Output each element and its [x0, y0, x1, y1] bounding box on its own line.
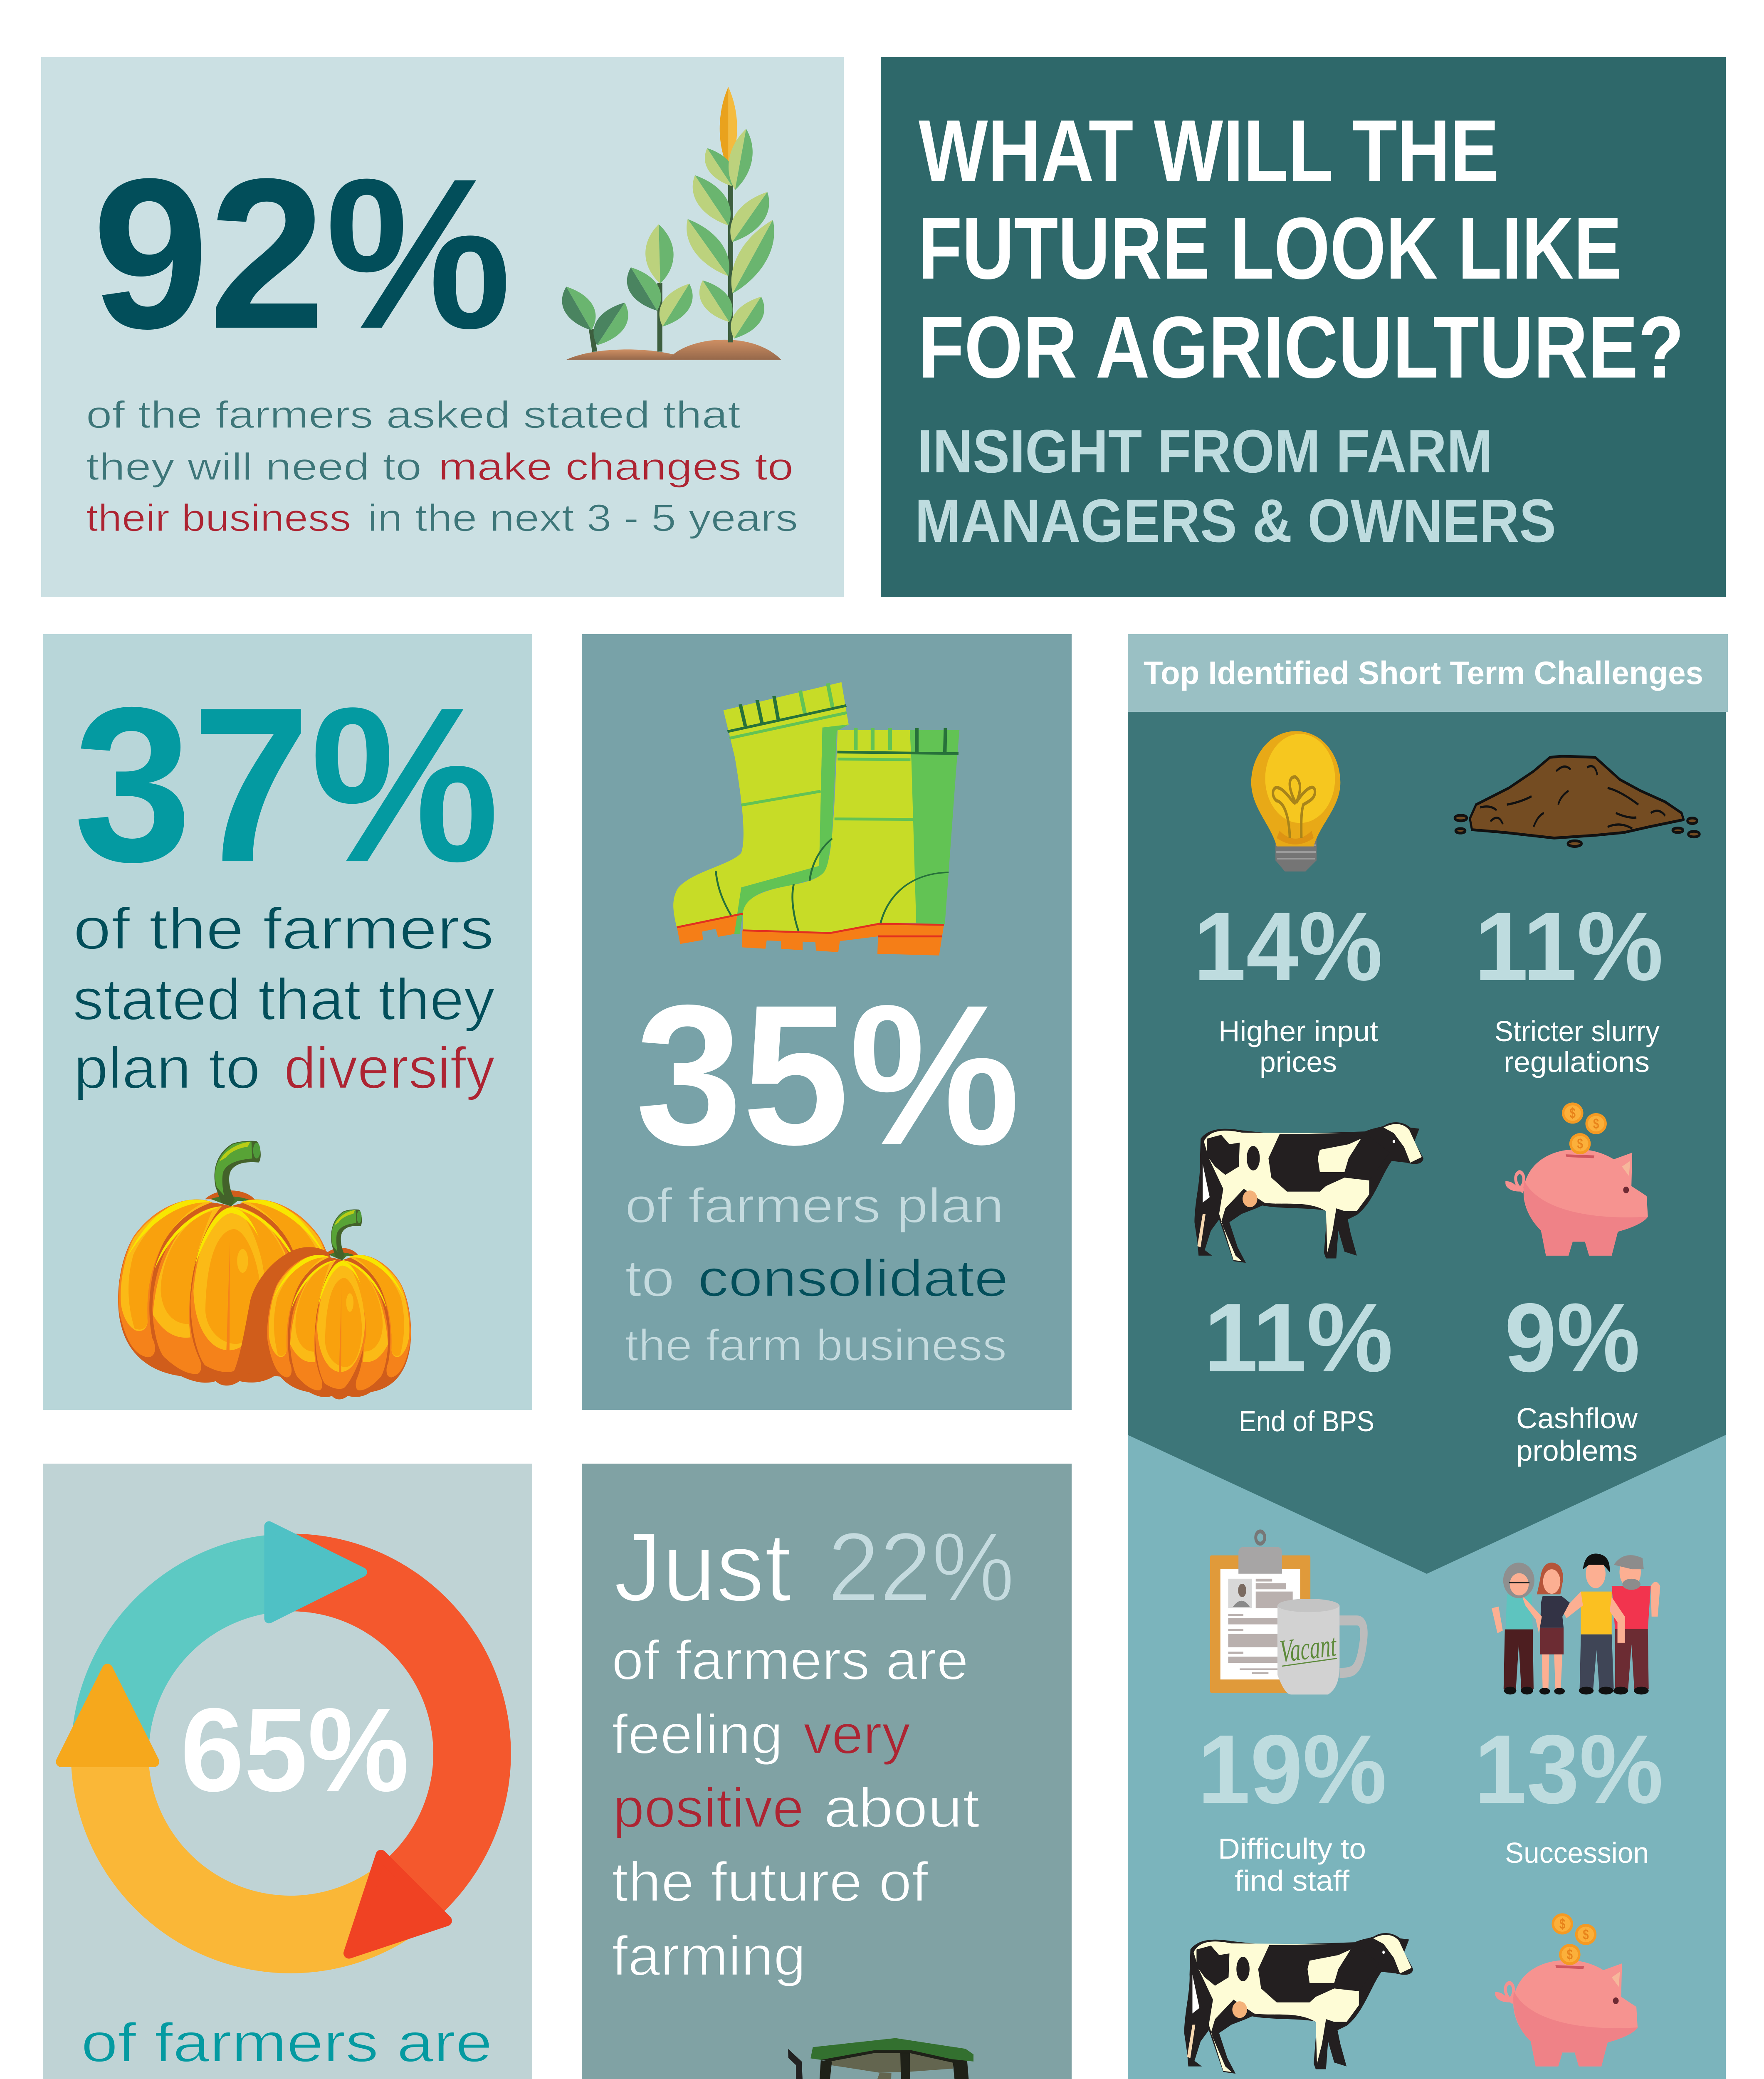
icon: family group [1492, 1553, 1660, 1694]
donut cycle chart [61, 1526, 472, 1953]
icon: green tractor [632, 2038, 1043, 2079]
stat: 11% slurry: regulations [1504, 1046, 1650, 1078]
text: 92% description: of the farmers asked stated that [86, 394, 741, 436]
text: 37% description: plan to [74, 1035, 260, 1101]
stat: 11% slurry: Stricter slurry [1495, 1015, 1660, 1047]
icon: slurry heap [1455, 756, 1700, 847]
icon: cow [1194, 1122, 1423, 1263]
stat: 11% BPS: 11% [1204, 1283, 1393, 1392]
text: 92% description: in the next 3 - 5 years [368, 497, 798, 539]
text: positive description: the future of [612, 1851, 929, 1913]
text: 35% description: of farmers plan [625, 1178, 1004, 1233]
text: just 22%: Just [614, 1512, 791, 1622]
big number 35%: 35% [635, 963, 1020, 1186]
text: 92% description: they will need to [86, 446, 422, 488]
subheading [915, 417, 1556, 555]
big number 37%: 37% [74, 662, 499, 908]
text: 35% description [625, 1178, 1008, 1370]
text: 92% description [86, 394, 798, 539]
panel: title [881, 57, 1726, 597]
panel: 37% diversify [43, 634, 532, 1410]
stat: 19% staff [1198, 1714, 1387, 1897]
stat: 13% succession: 13% [1474, 1714, 1663, 1824]
stat: 9% cashflow: Cashflow [1516, 1402, 1638, 1435]
text: positive description: of farmers are [612, 1630, 968, 1691]
panel: 35% consolidate [582, 634, 1072, 1410]
stat: 9% cashflow: problems [1516, 1435, 1638, 1467]
panel: challenges [1128, 634, 1728, 2079]
donut value 65%: 65% [180, 1683, 409, 1816]
stat: 14%: Higher input [1218, 1015, 1378, 1047]
text: 35% description: to [625, 1249, 674, 1307]
text: 92% description: make changes to [438, 446, 793, 488]
panel: 92% stat [41, 57, 844, 597]
stat: 9% cashflow [1505, 1283, 1640, 1467]
text: 37% description: stated that they [73, 966, 495, 1032]
text: just 22%: 22% [828, 1512, 1015, 1622]
text: positive description: positive [613, 1777, 804, 1839]
text: 92% description: their business [86, 497, 351, 539]
heading: FUTURE LOOK LIKE [918, 199, 1622, 297]
stat: 13% succession [1474, 1714, 1663, 1869]
stat: 11% BPS: End of BPS [1239, 1405, 1374, 1437]
text: positive description: about [824, 1777, 980, 1839]
icon: cow (long term) [1184, 1933, 1413, 2074]
subheading: INSIGHT FROM FARM [917, 417, 1493, 486]
stat: 19% staff: Difficulty to [1218, 1832, 1366, 1865]
stat: 19% staff: find staff [1235, 1864, 1350, 1897]
icon: piggy bank (long term) [1497, 1914, 1638, 2067]
text: positive description: feeling [612, 1704, 783, 1765]
icon: growing plants [553, 87, 787, 360]
icon: vacancy clipboard and mug: Vacant [1279, 1627, 1338, 1669]
text: 37% description [73, 896, 495, 1101]
stat: 14% [1193, 891, 1383, 1078]
short term header: Top Identified Short Term Challenges [1144, 654, 1703, 691]
stat: 14%: prices [1260, 1046, 1337, 1078]
short term header [1128, 634, 1728, 712]
stat: 11% slurry: 11% [1474, 891, 1663, 1001]
text: positive description: very [803, 1704, 910, 1765]
text: positive description [612, 1630, 980, 1987]
heading: WHAT WILL THE [919, 101, 1499, 200]
subheading: MANAGERS & OWNERS [915, 487, 1556, 555]
stat: 13% succession: Succession [1505, 1837, 1649, 1869]
short term section background [1128, 712, 1726, 2079]
text: 35% description: consolidate [698, 1249, 1008, 1307]
heading [918, 101, 1684, 396]
text: 37% description: diversify [284, 1035, 495, 1101]
panel: just 22% positive [582, 1464, 1072, 2079]
icon: vacancy clipboard and mug [1210, 1531, 1364, 1694]
text: 35% description: the farm business [625, 1320, 1007, 1370]
stat: 19% staff: 19% [1198, 1714, 1387, 1824]
icon: piggy bank [1507, 1103, 1648, 1256]
stat: 14%: 14% [1193, 891, 1383, 1001]
text: positive description: farming [612, 1925, 806, 1987]
short term chevron [1128, 707, 1726, 1574]
text: just 22% [614, 1512, 1015, 1622]
text: 65% description: of farmers are [81, 2012, 492, 2073]
big number 92%: 92% [92, 134, 511, 373]
icon: pumpkins [118, 1141, 411, 1399]
icon: light bulb [1251, 731, 1340, 872]
panel: 65% making changes [43, 1464, 532, 2079]
icon: wellington boots [673, 682, 959, 956]
text: 37% description: of the farmers [73, 896, 494, 961]
stat: 9% cashflow: 9% [1505, 1283, 1640, 1392]
stat: 11% slurry [1474, 891, 1663, 1078]
